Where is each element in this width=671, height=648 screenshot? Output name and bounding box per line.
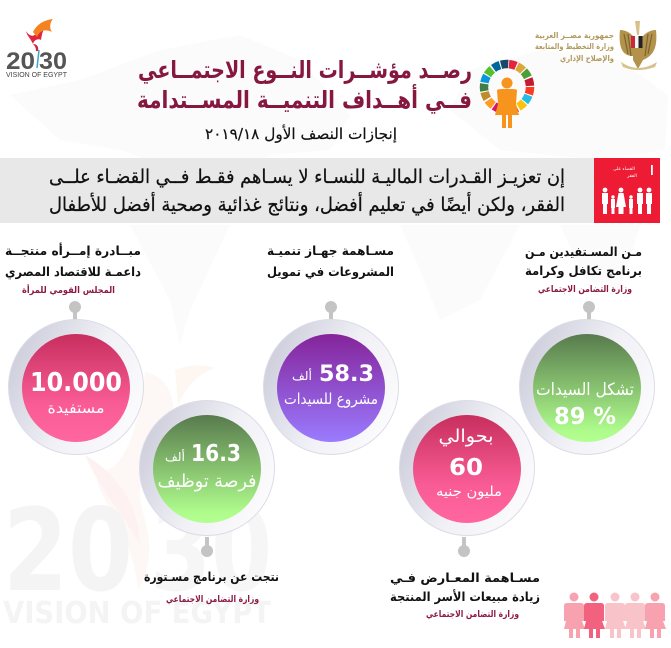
circle: 60 million pounds	[400, 400, 534, 557]
ministry name: جمهورية مصــر العربية	[535, 31, 614, 40]
circle: 58.3 thousand projects	[264, 301, 398, 454]
world map watermark	[10, 35, 668, 345]
text block: productive woman initiative	[5, 242, 141, 296]
text block: beneficiaries: مـن المسـتفيدين مـن	[525, 244, 642, 259]
ministry name: وزارة التخطيط والمتابعة	[535, 42, 614, 51]
icon: five women pictogram	[564, 592, 666, 638]
ministry name	[535, 31, 614, 63]
banner text: الفقر، ولكن أيضًا في تعليم أفضل، ونتائج غذائية وصحية أفضل للأطفال	[49, 192, 565, 216]
subtitle: إنجازات النصف الأول ٢٠١٩/١٨	[205, 124, 397, 143]
logo: vision 2030: 20	[6, 48, 35, 75]
logo: vision 2030	[6, 19, 67, 79]
text block: beneficiaries: وزارة التضامن الاجتماعي	[538, 285, 632, 295]
circle: women 89 percent: 89 %	[554, 404, 616, 430]
circle: 58.3 thousand projects: 58.3	[319, 362, 374, 387]
text block: exhibitions: مسـاهمة المعـارض فـي	[390, 570, 540, 585]
text block: beneficiaries: برنامج تكافل وكرامة	[525, 263, 642, 278]
circle: 16.3 thousand jobs: 16.3	[191, 441, 241, 467]
circle: 16.3 thousand jobs: فرصة توظيف	[158, 471, 256, 492]
circle: 58.3 thousand projects: مشروع للسيدات	[284, 390, 378, 408]
circle: 16.3 thousand jobs: ألف	[165, 449, 185, 464]
text block: exhibitions	[390, 570, 540, 620]
circle: 60 million pounds: بحوالي	[438, 426, 494, 447]
text block: productive woman initiative: داعمـة للاقتصاد المصري	[5, 264, 141, 279]
text block: productive woman initiative: المجلس القومي للمرأة	[22, 284, 115, 296]
title: فــي أهــداف التنميــة المســتدامة	[137, 84, 472, 114]
text block: projects	[267, 243, 394, 279]
text block: beneficiaries	[525, 244, 642, 295]
title	[137, 56, 472, 114]
text block: productive woman initiative: مبــادرة إمــرأه منتجــة	[5, 242, 141, 258]
banner text	[49, 166, 565, 216]
logo: egypt coat of arms	[620, 21, 657, 70]
banner text: إن تعزيـز القـدرات الماليـة للنسـاء لا يسـاهم فقـط فــي القضـاء علــى	[49, 166, 565, 189]
circle: women 89 percent: تشكل السيدات	[536, 380, 634, 400]
banner	[0, 158, 594, 223]
watermark: 2030 vision of egypt	[3, 365, 272, 631]
circle: 10,000 beneficiaries	[8, 301, 144, 454]
ministry name: والإصلاح الإداري	[560, 54, 614, 63]
icon: sdg 1 no poverty: الفقر	[626, 174, 637, 179]
circle: 58.3 thousand projects: ألف	[292, 368, 312, 383]
circle: 60 million pounds: مليون جنيه	[436, 484, 502, 500]
circle: 10,000 beneficiaries: مستفيدة	[48, 399, 104, 417]
logo: vision 2030: 30	[39, 48, 67, 75]
icon: sdg wheel with woman	[474, 54, 540, 128]
text block: projects: مسـاهمة جهـاز تنميـة	[267, 243, 394, 258]
text block: exhibitions: وزارة التضامن الاجتماعي	[426, 610, 519, 620]
logo: vision 2030: VISION OF EGYPT	[6, 70, 67, 79]
text block: projects: المشروعات في تمويل	[267, 264, 394, 279]
watermark: 2030 vision of egypt: VISION OF EGYPT	[3, 596, 271, 631]
text block: sitara program	[144, 569, 279, 605]
title: رصــد مؤشــرات النــوع الاجتمــاعي	[138, 56, 472, 84]
circle: women 89 percent	[520, 301, 654, 454]
watermark: 2030 vision of egypt: 20	[3, 484, 133, 617]
text block: sitara program: وزارة التضامن الاجتماعي	[166, 595, 259, 605]
icon: sdg 1 no poverty	[594, 158, 660, 223]
watermark: 2030 vision of egypt: 30	[150, 484, 272, 617]
text block: exhibitions: زيادة مبيعات الأسر المنتجة	[390, 589, 540, 604]
circle: 60 million pounds: 60	[449, 455, 483, 481]
text block: sitara program: نتجت عن برنامج مسـتورة	[144, 569, 279, 584]
circle: 10,000 beneficiaries: 10.000	[30, 368, 122, 398]
circle: 16.3 thousand jobs	[140, 400, 274, 557]
icon: sdg 1 no poverty: القضاء على	[613, 167, 635, 172]
